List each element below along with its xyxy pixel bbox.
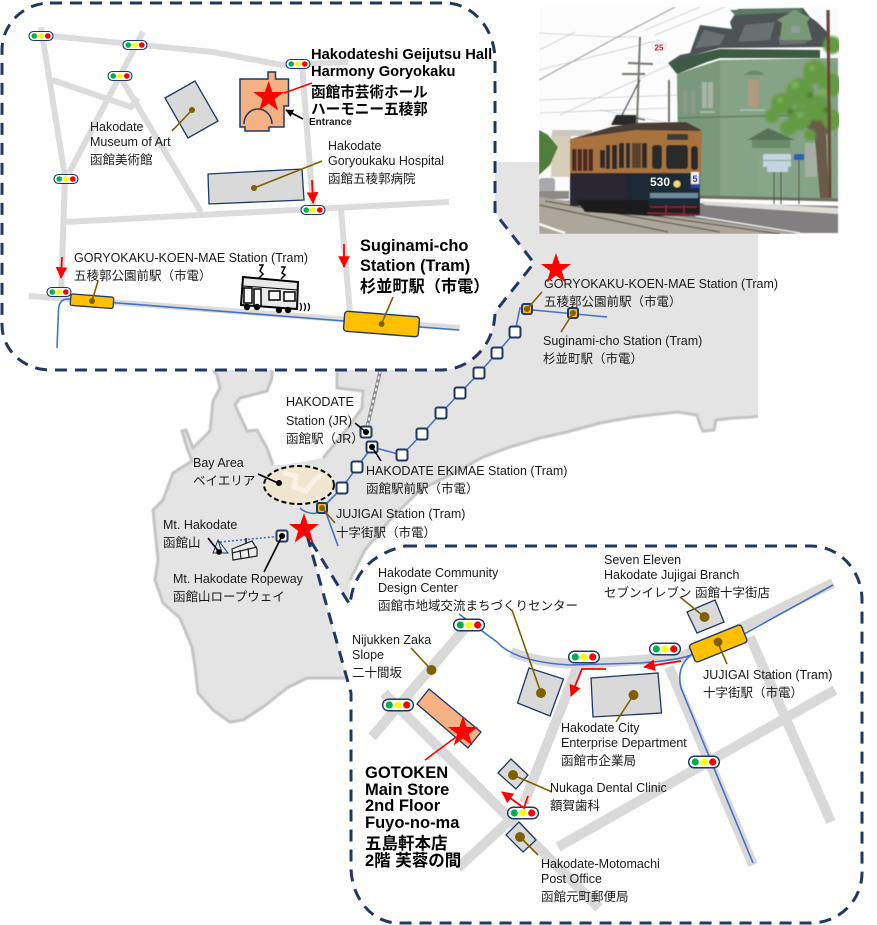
- label: hospital: Goryoukaku Hospital: [328, 154, 444, 168]
- label: Post Office: 函館元町郵便局: [541, 890, 629, 904]
- tram route line: [300, 308, 607, 546]
- panel: Goryokaku area callout: [2, 3, 534, 370]
- label: Suginami-cho: 杉並町駅（市電）: [360, 277, 490, 296]
- label: Hakodate JR station: [286, 395, 364, 446]
- label: Seven Eleven: Hakodate Jujigai Branch: [604, 568, 740, 582]
- label: Suginami-cho station overview: 杉並町駅（市電）: [543, 352, 643, 366]
- label: Enterprise Department: 函館市企業局: [561, 753, 636, 768]
- label: Goryokaku-Koen-Mae: [74, 251, 308, 283]
- windows: [748, 80, 759, 107]
- label: Enterprise Department: Hakodate City: [561, 721, 640, 735]
- label: Jujigai station: [703, 668, 832, 700]
- Hakodate JR station marker: [355, 423, 372, 438]
- label: Hakodate Ekimae station: 函館駅前駅（市電）: [366, 481, 479, 496]
- traffic signals: [29, 32, 325, 296]
- heading: Harmony Goryokaku hall: [311, 47, 492, 118]
- label: Nukaga Dental Clinic: [550, 781, 667, 813]
- icon: mountain: [208, 538, 228, 555]
- hospital building: [208, 161, 322, 204]
- label: Mt. Hakodate Ropeway: Mt. Hakodate Ropeway: [173, 572, 304, 586]
- utility poles: [622, 37, 669, 123]
- label: Suginami-cho: Station (Tram): [360, 257, 470, 275]
- tram lines: [459, 585, 833, 863]
- label: Suginami-cho station overview: [543, 334, 702, 366]
- tram line: [57, 299, 459, 348]
- label: Hakodate JR station: HAKODATE: [286, 395, 354, 409]
- label: Suginami-cho station overview: Suginami-cho Station (Tram): [543, 334, 702, 348]
- heading: Harmony Goryokaku hall: ハーモニー五稜郭: [311, 100, 428, 118]
- entrance arrow: [286, 110, 303, 119]
- heading: Gotoken Main Store: Main Store: [365, 781, 449, 799]
- label: hospital: [328, 139, 444, 186]
- heading: Harmony Goryokaku hall: 函館市芸術ホール: [311, 83, 428, 101]
- road network: [372, 583, 835, 908]
- dormer: [777, 10, 812, 40]
- ropeway dotted line and station: [220, 530, 288, 572]
- label: Enterprise Department: [561, 721, 687, 768]
- tree and pole: [806, 118, 829, 198]
- Harmony Goryokaku hall building: [240, 72, 312, 131]
- label: Nukaga Dental Clinic: Nukaga Dental Clinic: [550, 781, 667, 795]
- label: hospital: Hakodate: [328, 139, 382, 153]
- label: Jujigai station overview: JUJIGAI Station (Tram): [336, 507, 465, 521]
- label: Goryokaku-Koen-Mae station overview: [544, 277, 778, 309]
- photo: tram in front of green building: 25: [654, 44, 664, 52]
- star: Gotoken pointer: [289, 513, 319, 542]
- traffic signals: [383, 619, 719, 819]
- Goryokaku-Koen-Mae station bar: [70, 281, 114, 309]
- label: Seven Eleven: [604, 553, 770, 600]
- tram stops on overview: [336, 326, 520, 494]
- label: entrance: Entrance: [309, 117, 352, 128]
- label: Jujigai station overview: 十字街駅（市電）: [336, 526, 436, 540]
- label: Mt. Hakodate: 函館山: [163, 536, 201, 550]
- label: Post Office: Post Office: [541, 872, 602, 886]
- road: [539, 200, 838, 233]
- label: Hakodate Ekimae station: HAKODATE EKIMAE Station (Tram): [366, 464, 567, 478]
- label: Community Design Center: [378, 566, 578, 613]
- label: Hakodate JR station: Station (JR): [286, 414, 352, 428]
- photo: tram in front of green building: 530: [650, 175, 670, 189]
- label: museum: 函館美術館: [90, 152, 153, 167]
- label: Suginami-cho: Suginami-cho: [360, 237, 468, 255]
- Nijukken Zaka marker: [411, 648, 436, 675]
- red route arrows: [502, 661, 681, 808]
- heading: Gotoken Main Store: 五島軒本店: [365, 834, 448, 853]
- label: Enterprise Department: Enterprise Department: [561, 736, 687, 750]
- panel: Jujigai area callout: [307, 535, 862, 923]
- icon: gondola: [232, 538, 257, 560]
- label: Hakodate Ekimae station: [366, 464, 567, 496]
- label: museum: Hakodate: [90, 120, 144, 134]
- label: Mt. Hakodate: Mt. Hakodate: [163, 518, 237, 532]
- star: Goryokaku pointer: [541, 253, 571, 282]
- heading: Gotoken Main Store: Fuyo-no-ma: [365, 814, 460, 832]
- Post Office building: [506, 822, 538, 855]
- label: Jujigai station: 十字街駅（市電）: [703, 686, 803, 700]
- label: Nijukken Zaka: Slope: [352, 648, 384, 662]
- label: Community Design Center: Hakodate Community: [378, 566, 499, 580]
- label: Goryokaku-Koen-Mae station overview: 五稜郭公園前駅（市電）: [544, 294, 682, 309]
- label: Bay Area: [193, 456, 255, 488]
- heading: Gotoken Main Store: 2階 芙蓉の間: [365, 850, 461, 870]
- Jujigai tram stop marker: [317, 503, 335, 523]
- label: Nijukken Zaka: [352, 633, 431, 680]
- label: Seven Eleven: Seven Eleven: [604, 553, 681, 567]
- Hakodate Ekimae tram stop marker: [366, 442, 381, 461]
- photo: tram in front of green building: 5: [692, 174, 698, 184]
- label: Bay Area: ベイエリア: [193, 474, 255, 488]
- label: Suginami-cho: [360, 237, 490, 296]
- land map of Hakodate: [153, 162, 758, 722]
- signs: [763, 154, 791, 160]
- icon: tram: [241, 265, 310, 312]
- tram: [570, 122, 702, 140]
- museum building: [165, 81, 218, 138]
- photo: tram in front of green building: [539, 7, 842, 234]
- Community Design Center building: [512, 610, 564, 716]
- label: Seven Eleven: セブンイレブン 函館十字街店: [604, 585, 770, 600]
- label: Community Design Center: Design Center: [378, 581, 458, 595]
- heading: Harmony Goryokaku hall: Hakodateshi Geijutsu Hall: [311, 47, 492, 63]
- label: Post Office: Hakodate-Motomachi: [541, 857, 660, 871]
- JR railway line: [366, 372, 380, 432]
- Suginami-cho station bar: [343, 297, 420, 337]
- red route arrows: [61, 180, 344, 278]
- Goryokaku-Koen-Mae and Suginami-cho stops: [522, 292, 578, 332]
- heading: Gotoken Main Store: 2nd Floor: [365, 797, 441, 815]
- label: Community Design Center: 函館市地域交流まちづくりセンター: [378, 599, 578, 613]
- label: Hakodate JR station: 函館駅（JR）: [286, 432, 364, 446]
- Enterprise Department building: [591, 673, 662, 722]
- label: Goryokaku-Koen-Mae: GORYOKAKU-KOEN-MAE Station (Tram): [74, 251, 308, 265]
- label: Mt. Hakodate: [163, 518, 237, 550]
- label: Nijukken Zaka: Nijukken Zaka: [352, 633, 431, 647]
- heading: Gotoken Main Store: [365, 764, 461, 870]
- green building facade: [677, 58, 838, 200]
- Bay Area oval: [258, 466, 334, 504]
- Nukaga Dental Clinic building: [498, 759, 552, 792]
- label: Nukaga Dental Clinic: 額賀歯科: [550, 799, 601, 813]
- label: Jujigai station: JUJIGAI Station (Tram): [703, 668, 832, 682]
- label: Jujigai station overview: [336, 507, 465, 540]
- label: Mt. Hakodate Ropeway: 函館山ロープウェイ: [173, 590, 285, 604]
- road network: [29, 27, 460, 328]
- Seven Eleven building: [680, 597, 724, 633]
- label: hospital: 函館五稜郭病院: [328, 172, 416, 186]
- flag: [652, 42, 667, 51]
- Gotoken Main Store building: [417, 689, 481, 760]
- heading: Harmony Goryokaku hall: Harmony Goryokaku: [311, 64, 455, 80]
- heading: Gotoken Main Store: GOTOKEN: [365, 764, 448, 782]
- label: museum: Museum of Art: [90, 135, 171, 149]
- label: Bay Area: Bay Area: [193, 456, 244, 470]
- label: Goryokaku-Koen-Mae: 五稜郭公園前駅（市電）: [74, 268, 212, 283]
- Jujigai station bar: [689, 624, 748, 664]
- label: Post Office: [541, 857, 660, 904]
- label: Goryokaku-Koen-Mae station overview: GORYOKAKU-KOEN-MAE Station (Tram): [544, 277, 778, 291]
- label: Nijukken Zaka: 二十間坂: [352, 666, 403, 680]
- label: museum: [90, 120, 171, 167]
- label: Mt. Hakodate Ropeway: [173, 572, 304, 604]
- roof: [668, 8, 827, 63]
- background buildings: [551, 135, 571, 177]
